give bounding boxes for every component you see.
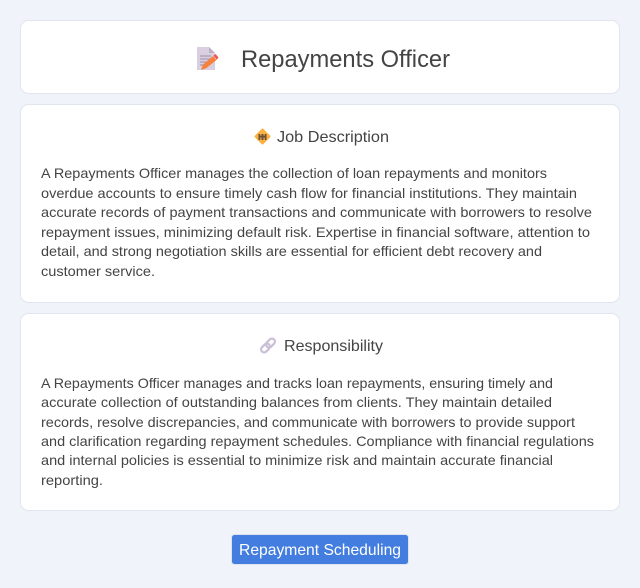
heading: job description: Job Description — [277, 129, 389, 146]
text block: responsibility: records, resolve discrepancies, and communicate with borrowers to provide support — [41, 414, 575, 430]
text block: responsibility — [41, 375, 594, 488]
text block: job description: repayment issues, minimizing default risk. Expertise in financial software, attention to — [41, 224, 590, 240]
text block: responsibility: and internal policies is essential to minimize risk and maintain accurate financial — [41, 452, 553, 468]
button: repayment scheduling: Repayment Scheduling — [239, 542, 401, 559]
text block: responsibility: A Repayments Officer manages and tracks loan repayments, ensuring timely and — [41, 375, 553, 391]
text block: job description: detail, and strong negotiation skills are essential for efficient debt recovery and — [41, 243, 542, 259]
heading: responsibility: Responsibility — [284, 338, 383, 355]
text block: job description: customer service. — [41, 263, 155, 279]
panel: responsibility — [20, 314, 620, 510]
icon: document with pencil — [197, 47, 218, 70]
title: Repayments Officer — [241, 46, 450, 73]
text block: job description — [41, 165, 592, 279]
text block: responsibility: and clarification regarding repayment schedules. Compliance with financial regulations — [41, 433, 594, 449]
text block: job description: accurate records of payment transactions and communicate with borrowers to resolve — [41, 204, 592, 220]
text block: responsibility: reporting. — [41, 472, 103, 488]
panel: title header — [20, 20, 620, 94]
icon: orange diamond sign — [256, 130, 270, 144]
text block: job description: A Repayments Officer manages the collection of loan repayments and monitors — [41, 165, 547, 181]
text block: job description: overdue accounts to ensure timely cash flow for financial institutions. They maintain — [41, 185, 577, 201]
icon: chain link — [260, 337, 276, 354]
panel: job description — [20, 104, 620, 302]
button: repayment scheduling — [232, 534, 408, 564]
text block: responsibility: accurate collection of outstanding balances from clients. They maintain detailed — [41, 394, 552, 410]
